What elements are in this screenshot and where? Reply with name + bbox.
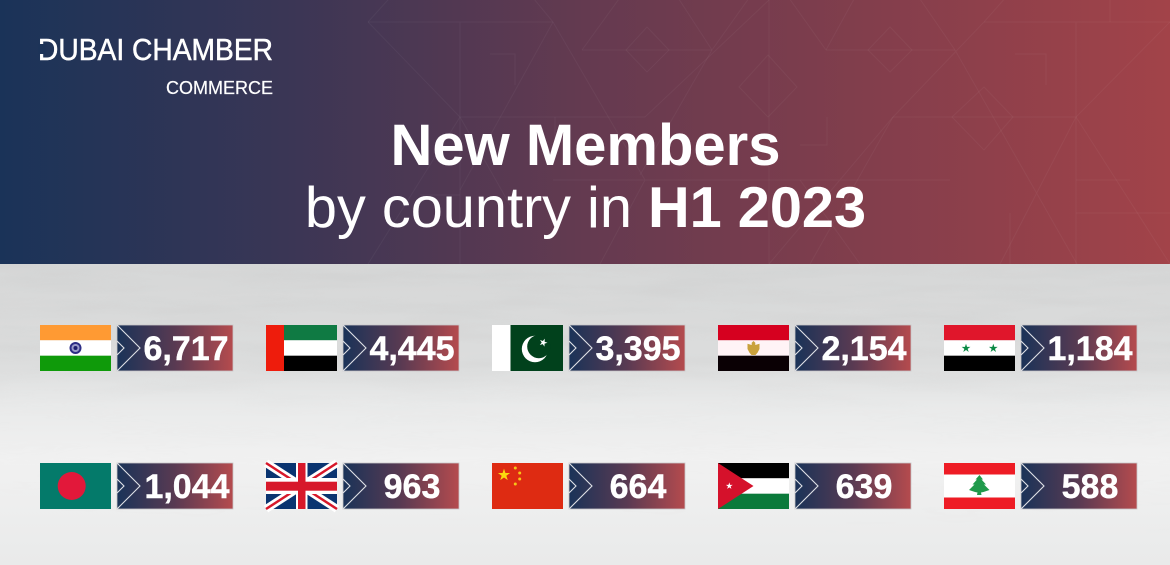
value box: 588: 588 — [1062, 468, 1118, 506]
value box: 2,154 — [795, 325, 911, 371]
logo: Dubai Chamber Commerce: DUBAI CHAMBER — [38, 33, 273, 67]
value box: 1,184: 1,184 — [1047, 330, 1133, 368]
flag: China — [492, 463, 563, 509]
value box: 6,717 — [117, 325, 233, 371]
UAE entry — [266, 325, 459, 371]
flag: Egypt — [718, 325, 789, 371]
value box: 664 — [569, 463, 685, 509]
value box: 6,717: 6,717 — [143, 330, 229, 368]
Syria entry — [944, 325, 1137, 371]
value box: 588 — [1021, 463, 1137, 509]
marble background — [0, 264, 1170, 474]
Bangladesh entry — [40, 463, 233, 509]
UK entry — [266, 463, 459, 509]
value box: 3,395: 3,395 — [595, 330, 681, 368]
flag: Lebanon — [944, 463, 1015, 509]
India entry — [40, 325, 233, 371]
value box: 1,044 — [117, 463, 233, 509]
Pakistan entry — [492, 325, 685, 371]
flag: Bangladesh — [40, 463, 111, 509]
Lebanon entry — [944, 463, 1137, 509]
header band — [0, 0, 1170, 264]
flag: India — [40, 325, 111, 371]
title — [305, 113, 866, 240]
flag: Jordan — [718, 463, 789, 509]
value box: 639: 639 — [836, 468, 892, 506]
flag: UAE — [266, 325, 337, 371]
value box: 3,395 — [569, 325, 685, 371]
China entry — [492, 463, 685, 509]
value box: 963: 963 — [384, 468, 440, 506]
flag: Syria — [944, 325, 1015, 371]
logo: Dubai Chamber Commerce: COMMERCE — [166, 78, 273, 98]
value box: 1,044: 1,044 — [144, 468, 230, 506]
logo: Dubai Chamber Commerce — [38, 33, 273, 98]
value box: 664: 664 — [610, 468, 666, 506]
value box: 1,184 — [1021, 325, 1137, 371]
value box: 639 — [795, 463, 911, 509]
value box: 963 — [343, 463, 459, 509]
value box: 4,445 — [343, 325, 459, 371]
value box: 4,445: 4,445 — [369, 330, 455, 368]
flag: Pakistan — [492, 325, 563, 371]
value box: 2,154: 2,154 — [821, 330, 907, 368]
title: New Members — [390, 113, 781, 178]
Jordan entry — [718, 463, 911, 509]
title: by country in H1 2023 — [305, 176, 866, 240]
Egypt entry — [718, 325, 911, 371]
flag: United Kingdom — [266, 463, 337, 509]
